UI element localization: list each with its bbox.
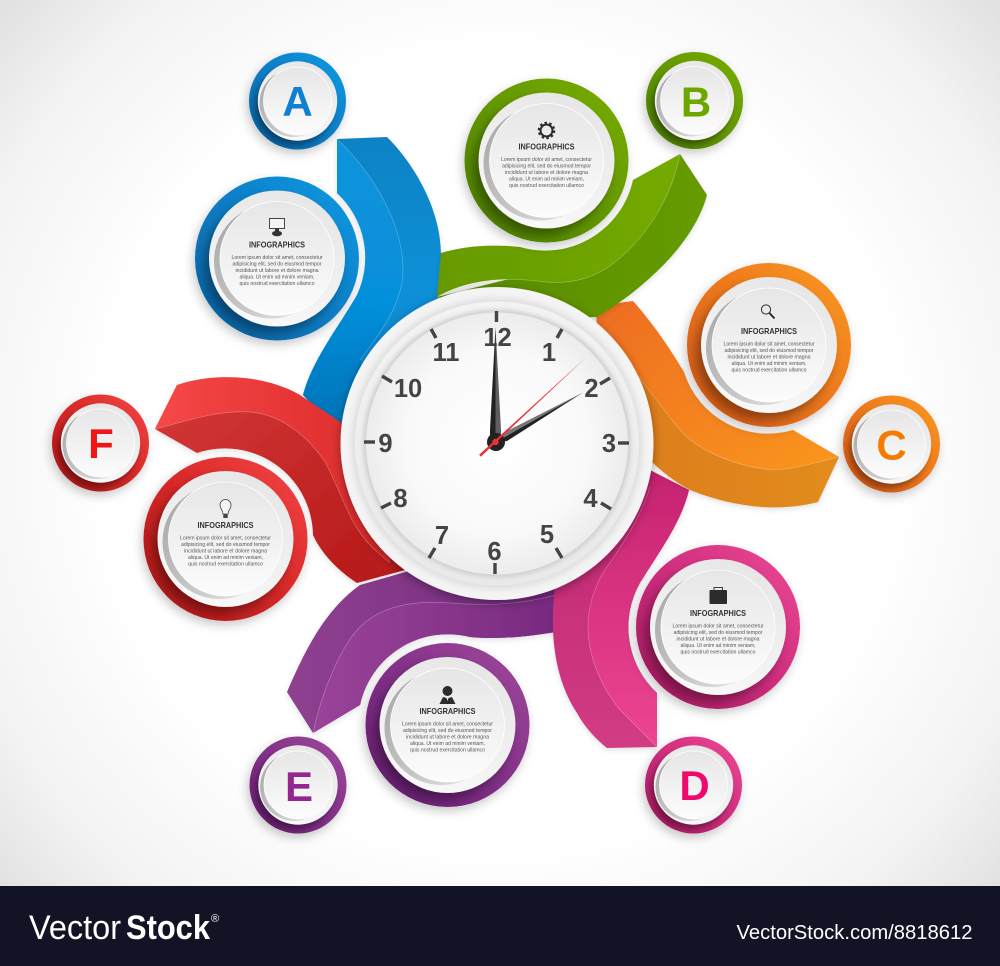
- clock numerals: 12: [483, 324, 512, 352]
- panel: E info circle: [366, 643, 530, 807]
- ribbons group: [155, 137, 839, 748]
- badge: E: E: [285, 763, 313, 810]
- text: A heading and body: quis nostrud exercitation ullamco: [240, 281, 314, 287]
- clock numerals: 11: [433, 339, 459, 367]
- text: D heading and body: [672, 608, 764, 656]
- text: F heading and body: adipisicing elit, sed do eiusmod tempor: [181, 542, 270, 548]
- clock numerals: 9: [378, 430, 393, 458]
- clock numerals: 10: [394, 375, 422, 403]
- text: B heading and body: INFOGRAPHICS: [518, 142, 575, 152]
- panel: B info circle: [464, 78, 628, 242]
- second hand: [479, 357, 587, 457]
- clock numerals: 7: [435, 522, 449, 550]
- text: D heading and body: incididunt ut labore et dolore magna: [676, 636, 760, 642]
- text: D heading and body: INFOGRAPHICS: [690, 608, 746, 618]
- text: C heading and body: INFOGRAPHICS: [741, 326, 797, 336]
- text: F heading and body: Lorem ipsum dolor sit amet, consectetur: [180, 536, 271, 542]
- ribbon: green: [437, 154, 707, 320]
- badge: D: [645, 736, 742, 834]
- text: D heading and body: adipisicing elit, sed do eiusmod tempor: [674, 630, 763, 636]
- clock numerals: [378, 324, 616, 566]
- text: E heading and body: incididunt ut labore et dolore magna: [406, 734, 490, 740]
- text: B heading and body: Lorem ipsum dolor sit amet, consectetur: [501, 157, 592, 163]
- icon: light bulb: [220, 500, 231, 518]
- text: A heading and body: incididunt ut labore et dolore magna: [236, 268, 319, 274]
- badge: A: A: [282, 78, 313, 125]
- text: F heading and body: [180, 520, 271, 568]
- clock hub: [487, 433, 505, 451]
- icon: gear: [539, 123, 554, 138]
- footer: image id: VectorStock.com/8818612: [736, 922, 972, 944]
- badge: D: D: [679, 762, 710, 809]
- icon: magnifier: [761, 305, 774, 318]
- text: D heading and body: Lorem ipsum dolor sit amet, consectetur: [672, 624, 764, 630]
- text: D heading and body: aliqua. Ut enim ad minim veniam,: [680, 643, 756, 649]
- panel: C info circle: [687, 263, 851, 427]
- clock numerals: 3: [602, 430, 616, 458]
- text: A heading and body: INFOGRAPHICS: [249, 240, 305, 250]
- text: E heading and body: INFOGRAPHICS: [420, 706, 476, 716]
- text: A heading and body: aliqua. Ut enim ad minim veniam,: [240, 274, 315, 280]
- text: B heading and body: quis nostrud exercitation ullamco: [509, 183, 584, 189]
- badge: C: [843, 396, 940, 492]
- footer: logo: Vector: [29, 909, 121, 947]
- text: A heading and body: adipisicing elit, sed do eiusmod tempor: [232, 262, 322, 268]
- text: F heading and body: incididunt ut labore et dolore magna: [184, 548, 268, 554]
- panel: D info circle: [636, 545, 800, 709]
- footer: logo: Stock: [126, 909, 210, 947]
- badge: C: C: [876, 422, 907, 468]
- panel: A info circle: [195, 176, 359, 340]
- clock numerals: 4: [583, 485, 598, 513]
- text: C heading and body: incididunt ut labore et dolore magna: [728, 354, 811, 360]
- icon: person: [440, 686, 456, 704]
- footer bar: [0, 886, 1000, 966]
- ribbon: blue: [303, 137, 441, 440]
- text: E heading and body: quis nostrud exercitation ullamco: [410, 748, 485, 754]
- clock numerals: 6: [487, 538, 502, 566]
- footer: logo: ®: [211, 913, 219, 925]
- text: C heading and body: Lorem ipsum dolor sit amet, consectetur: [724, 342, 815, 348]
- panel: F info circle: [144, 457, 308, 621]
- text: A heading and body: [232, 240, 323, 287]
- badge: E: [250, 736, 346, 834]
- badge: F: [52, 394, 149, 492]
- ribbon: purple: [287, 565, 556, 733]
- text: E heading and body: adipisicing elit, sed do eiusmod tempor: [403, 728, 492, 734]
- text: C heading and body: quis nostrud exercitation ullamco: [732, 368, 806, 374]
- clock numerals: 5: [540, 521, 554, 549]
- text: C heading and body: aliqua. Ut enim ad minim veniam,: [732, 361, 807, 367]
- text: D heading and body: quis nostrud exercitation ullamco: [680, 650, 756, 656]
- minute hand: [490, 327, 501, 444]
- text: F heading and body: aliqua. Ut enim ad minim veniam,: [188, 555, 263, 561]
- icon: monitor: [270, 218, 284, 236]
- icon: briefcase: [710, 588, 727, 604]
- text: B heading and body: aliqua. Ut enim ad minim veniam,: [509, 176, 584, 182]
- badge: B: [646, 52, 743, 149]
- text: C heading and body: adipisicing elit, sed do eiusmod tempor: [724, 348, 814, 354]
- clock numerals: 2: [584, 375, 599, 403]
- clock numerals: 8: [393, 485, 408, 513]
- ribbon: magenta: [553, 465, 689, 748]
- text: F heading and body: quis nostrud exercitation ullamco: [188, 562, 263, 568]
- badge: B: B: [681, 78, 711, 126]
- ribbon: red: [155, 377, 405, 583]
- clock ticks: [364, 311, 629, 574]
- text: F heading and body: INFOGRAPHICS: [198, 520, 254, 530]
- badge: F: F: [88, 420, 114, 467]
- badge: A: [249, 52, 346, 150]
- footer: logo: [29, 909, 219, 947]
- text: B heading and body: incididunt ut labore et dolore magna: [505, 170, 589, 176]
- clock numerals: 1: [542, 339, 556, 367]
- text: E heading and body: Lorem ipsum dolor sit amet, consectetur: [402, 722, 493, 728]
- hour hand: [496, 392, 583, 442]
- text: E heading and body: aliqua. Ut enim ad minim veniam,: [410, 741, 485, 747]
- text: C heading and body: [724, 326, 815, 374]
- clock: [340, 287, 654, 600]
- text: E heading and body: [402, 706, 493, 754]
- text: B heading and body: [501, 142, 592, 189]
- ribbon: orange: [596, 301, 839, 507]
- text: A heading and body: Lorem ipsum dolor sit amet, consectetur: [232, 255, 323, 261]
- text: B heading and body: adipisicing elit, sed do eiusmod tempor: [502, 164, 591, 170]
